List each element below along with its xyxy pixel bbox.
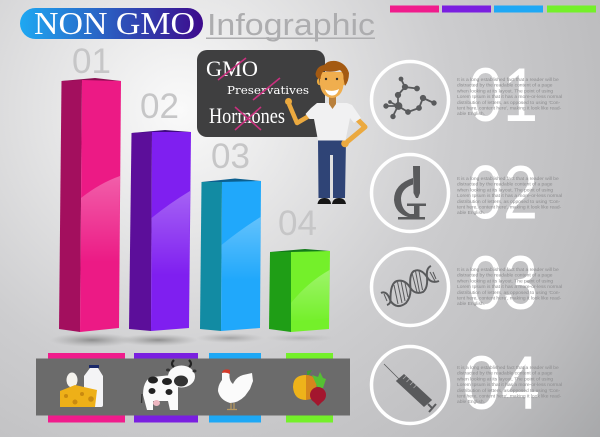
body text: It is a long established fact that a reader will be	[457, 267, 559, 273]
circle badge	[372, 248, 448, 326]
band panel	[36, 358, 350, 416]
title text: Infographic: Infographic	[207, 7, 375, 42]
icon: DNA helix	[381, 266, 439, 306]
large number: 02	[468, 150, 538, 236]
circle badge	[372, 62, 448, 138]
title	[20, 5, 375, 42]
step 02	[372, 150, 564, 236]
body text: It is a long established fact that a reader will be	[457, 176, 559, 182]
body text: distracted by the readable content of a page	[457, 371, 553, 377]
body text: tent here, content here', making it look like read-	[457, 204, 562, 210]
hip hand	[341, 140, 349, 147]
large number: 04	[462, 341, 540, 426]
raised hand	[285, 98, 292, 105]
icon: molecule	[384, 78, 436, 118]
icon: chicken	[218, 369, 253, 410]
icon: cow	[142, 360, 196, 410]
head	[320, 72, 344, 98]
title pill	[20, 8, 203, 39]
icon: fruit and beet	[293, 370, 326, 406]
large number: 03	[468, 241, 538, 326]
board word: Preservatives: Preservatives	[227, 84, 309, 97]
shoes	[318, 198, 346, 204]
body text: Lorem Ipsum is that it has a more-or-less normal	[457, 193, 562, 199]
body text: It is a long established fact that a reader will be	[457, 77, 559, 83]
icon: microscope	[394, 166, 426, 220]
blackboard	[197, 50, 325, 137]
circle badge	[372, 154, 448, 232]
bar 04 label: 04	[278, 204, 317, 243]
colour tabs	[48, 353, 333, 422]
body text: able English.	[457, 301, 485, 307]
bar 01	[59, 78, 121, 332]
body text: distracted by the readable content of a page	[457, 83, 553, 89]
neck	[329, 96, 336, 109]
shirt	[306, 103, 361, 140]
bar 01 label: 01	[72, 42, 111, 81]
bar 03	[200, 178, 261, 331]
body text: when looking at its layout. The point of using	[457, 376, 553, 382]
body text: able English.	[457, 111, 485, 117]
body text: distracted by the readable content of a page	[457, 273, 553, 279]
board word: GMO: GMO	[206, 56, 258, 81]
body text: distribution of letters, as opposed to using 'Con-	[457, 199, 561, 205]
strike-through marks	[218, 58, 280, 130]
body text: It is a long established fact that a reader will be	[457, 365, 559, 371]
body text: distribution of letters, as opposed to using 'Con-	[457, 100, 561, 106]
board panel	[197, 50, 325, 137]
hair	[316, 61, 349, 86]
step 03	[372, 241, 564, 326]
colour legend strip	[390, 6, 596, 12]
circle badge	[372, 346, 448, 424]
body text: when looking at its layout. The point of using	[457, 278, 553, 284]
step 01	[372, 53, 564, 138]
board word: Hormones: Hormones	[209, 103, 285, 128]
face	[325, 78, 339, 96]
food band	[36, 353, 350, 422]
body text: tent here, content here', making it look like read-	[457, 394, 562, 400]
icon: syringe	[384, 364, 436, 412]
body text: when looking at its layout. The point of using	[457, 187, 553, 193]
bar 03 label: 03	[211, 137, 250, 176]
bar 04	[269, 249, 330, 332]
body text: Lorem Ipsum is that it has a more-or-less normal	[457, 284, 562, 290]
raised arm	[289, 104, 309, 123]
teacher character	[285, 61, 365, 204]
ears	[317, 78, 346, 85]
large number: 01	[468, 53, 538, 138]
step 04	[372, 341, 564, 426]
title text: NON GMO: NON GMO	[34, 5, 195, 41]
arm on hip	[347, 119, 365, 142]
trousers	[318, 140, 346, 198]
body text: distribution of letters, as opposed to using 'Con-	[457, 290, 561, 296]
bar shadows	[50, 333, 334, 347]
body text: tent here, content here', making it look like read-	[457, 296, 562, 302]
body text: tent here, content here', making it look like read-	[457, 106, 562, 112]
body text: able English.	[457, 399, 485, 405]
body text: when looking at its layout. The point of using	[457, 88, 553, 94]
icon: dairy	[60, 365, 103, 407]
bar 02 label: 02	[140, 87, 179, 126]
bar 02	[129, 130, 191, 331]
body text: able English.	[457, 210, 485, 216]
body text: distracted by the readable content of a page	[457, 182, 553, 188]
body text: distribution of letters, as opposed to using 'Con-	[457, 388, 561, 394]
title underline	[206, 38, 375, 39]
body text: Lorem Ipsum is that it has a more-or-less normal	[457, 382, 562, 388]
bar chart	[50, 42, 334, 347]
body text: Lorem Ipsum is that it has a more-or-less normal	[457, 94, 562, 100]
